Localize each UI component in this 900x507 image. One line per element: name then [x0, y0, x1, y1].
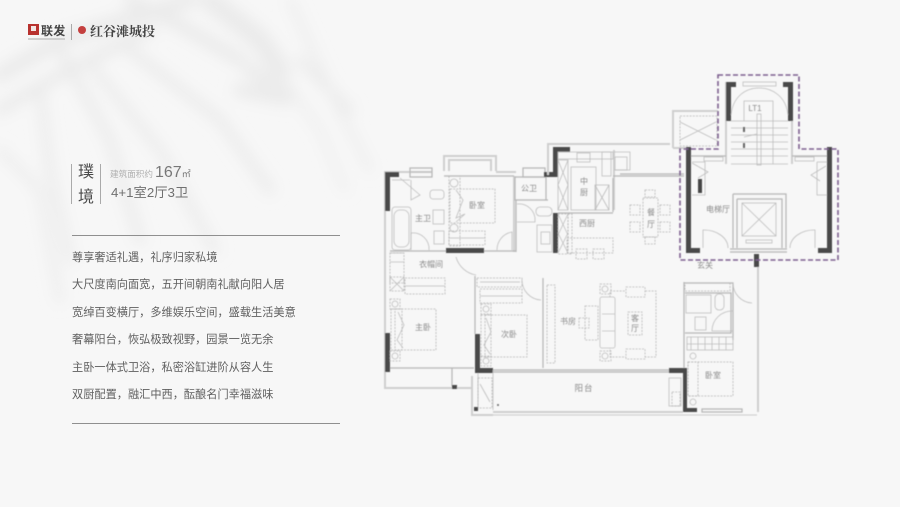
panel: shared elevator and stair core: LT1 — [748, 104, 762, 113]
panel: second bedroom — [475, 276, 555, 373]
panel: public bathroom — [515, 168, 554, 252]
icon: dining table: 厅 — [647, 220, 655, 229]
panel: shared elevator and stair core: 电梯厅 — [706, 204, 730, 214]
feature list: 宽绰百变横厅，多维娱乐空间，盛载生活美意 — [72, 307, 296, 319]
callout: purple dashed shared area outline — [680, 75, 838, 260]
panel: study and living room — [560, 284, 656, 361]
feature list: 尊享奢适礼遇，礼序归家私境 — [72, 252, 217, 264]
panel: shared elevator and stair core: 玄关 — [697, 260, 713, 270]
brand name: 联发 — [41, 24, 65, 38]
panel: second bedroom: 次卧 — [501, 329, 517, 339]
divider — [71, 24, 72, 40]
panel: study and living room: 客 — [631, 313, 639, 323]
panel: kitchens: 中 — [580, 176, 588, 186]
text: cloakroom: 衣帽间 — [419, 259, 443, 269]
feature list: 大尺度南向面宽，五开间朝南礼献向阳人居 — [72, 279, 285, 291]
panel: kitchens: 西厨 — [579, 219, 595, 228]
bottom rule — [72, 423, 340, 424]
panel: study and living room: 书房 — [560, 316, 576, 326]
panel: bedroom: 卧室 — [469, 200, 485, 210]
icon: red flower — [78, 26, 86, 34]
project name: 璞境 — [78, 164, 94, 206]
icon: dining table: 餐 — [647, 208, 655, 217]
tagline strip — [28, 38, 65, 40]
area: 建筑面积约167㎡ — [110, 164, 191, 181]
panel: main bathroom — [385, 168, 444, 388]
panel: balcony — [472, 370, 757, 415]
panel: kitchens — [548, 144, 684, 259]
panel: public bathroom: 公卫 — [521, 184, 537, 193]
top rule — [72, 235, 340, 236]
room layout: 4+1室2厅3卫 — [111, 185, 188, 200]
developer name: 红谷滩城投 — [90, 24, 155, 39]
panel: study and living room: 厅 — [631, 324, 639, 333]
feature list: 主卧一体式卫浴，私密浴缸进阶从容人生 — [72, 362, 273, 374]
panel: guest bedroom — [669, 262, 758, 412]
logo: Lianfa and Honggutan — [28, 24, 155, 40]
panel: main bathroom: 主卫 — [415, 213, 431, 223]
panel: master bedroom: 主卧 — [415, 322, 431, 332]
title rule left — [71, 164, 72, 204]
heading: project name and area — [71, 163, 191, 206]
title rule right — [100, 164, 101, 204]
icon: dining table — [630, 190, 670, 244]
feature list — [72, 251, 296, 401]
feature list: 奢幕阳台，恢弘极致视野，园景一览无余 — [72, 334, 273, 346]
feature list: 双厨配置，融汇中西，酝酿名门幸福滋味 — [72, 389, 273, 401]
panel: shared elevator and stair core — [673, 82, 832, 270]
text: cloakroom — [390, 253, 476, 294]
panel: master bedroom — [385, 299, 474, 389]
panel: bedroom — [390, 156, 516, 253]
icon: red square logo — [28, 24, 39, 35]
panel: kitchens: 厨 — [580, 188, 588, 197]
panel: balcony: 阳台 — [574, 383, 594, 393]
panel: guest bedroom: 卧室 — [705, 370, 721, 380]
